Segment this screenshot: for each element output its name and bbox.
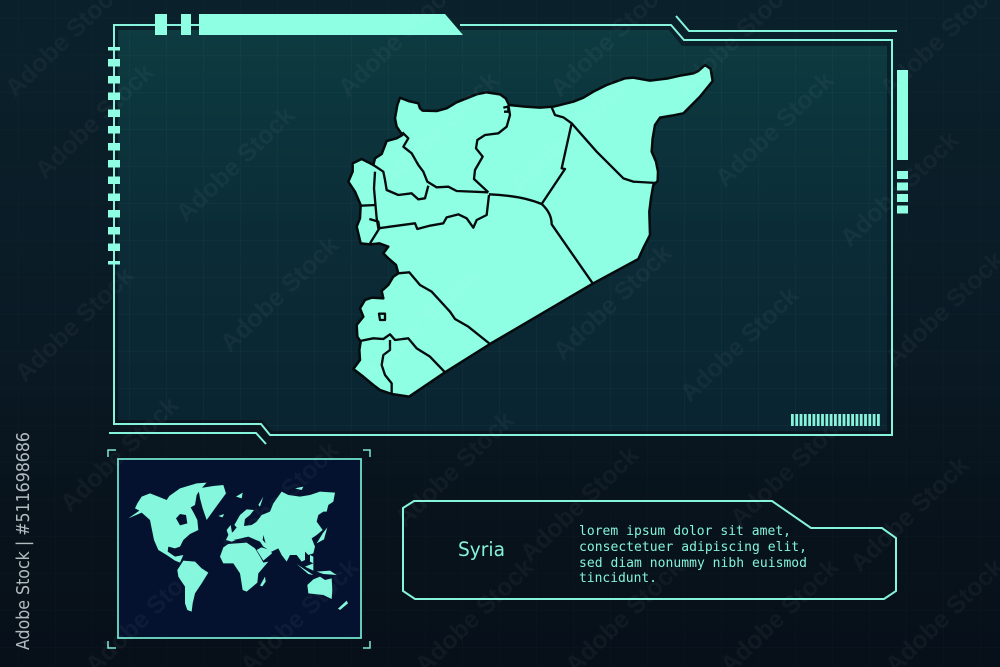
panel: main map panel xyxy=(114,25,892,435)
world map continents xyxy=(128,483,348,612)
watermarks: Adobe Stock xyxy=(390,406,519,532)
watermarks: Adobe Stock xyxy=(215,436,344,562)
panel fill xyxy=(118,30,887,431)
description text: tincidunt. xyxy=(579,571,657,586)
country shape xyxy=(348,65,713,397)
watermarks: Adobe Stock xyxy=(171,101,300,227)
lower left accent line xyxy=(109,433,266,444)
barcode ticks xyxy=(791,414,880,426)
watermarks: Adobe Stock xyxy=(845,451,974,577)
info box outline xyxy=(403,501,896,599)
inset corner brackets xyxy=(108,450,370,648)
description text: consectetuer adipiscing elit, xyxy=(579,540,807,555)
watermarks: Adobe Stock xyxy=(505,71,634,197)
watermarks: Adobe Stock xyxy=(548,239,677,365)
inset frame xyxy=(118,459,361,638)
panel: info box xyxy=(403,501,896,599)
watermarks: Adobe Stock xyxy=(675,281,804,407)
panel: world map inset xyxy=(108,450,370,648)
watermarks: Adobe Stock xyxy=(375,66,504,192)
watermarks: Adobe Stock xyxy=(515,441,644,567)
governorate borders xyxy=(360,105,657,394)
watermarks: Adobe Stock xyxy=(215,231,344,357)
country name: Syria xyxy=(458,538,505,561)
panel frame xyxy=(114,25,892,435)
map: Syria governorates xyxy=(348,65,713,397)
watermarks: Adobe Stock xyxy=(835,126,964,252)
hudson bay and inland seas xyxy=(176,514,266,543)
watermarks: Adobe Stock xyxy=(725,406,854,532)
watermarks: Adobe Stock xyxy=(55,391,184,517)
top bar decoration xyxy=(155,14,463,35)
watermarks: Adobe Stock xyxy=(355,261,484,387)
stock credit vertical text: Adobe Stock | #511698686 xyxy=(13,432,34,650)
left tick ruler xyxy=(108,47,120,264)
watermarks: Adobe Stock xyxy=(30,58,159,184)
description text: sed diam nonummy nibh euismod xyxy=(579,556,807,571)
top right accent line xyxy=(676,16,897,31)
description text: lorem ipsum dolor sit amet, xyxy=(579,524,791,539)
right gauge bars xyxy=(897,70,908,214)
watermarks: Adobe Stock xyxy=(10,261,139,387)
watermarks: Adobe Stock xyxy=(710,66,839,192)
description text xyxy=(579,524,807,586)
